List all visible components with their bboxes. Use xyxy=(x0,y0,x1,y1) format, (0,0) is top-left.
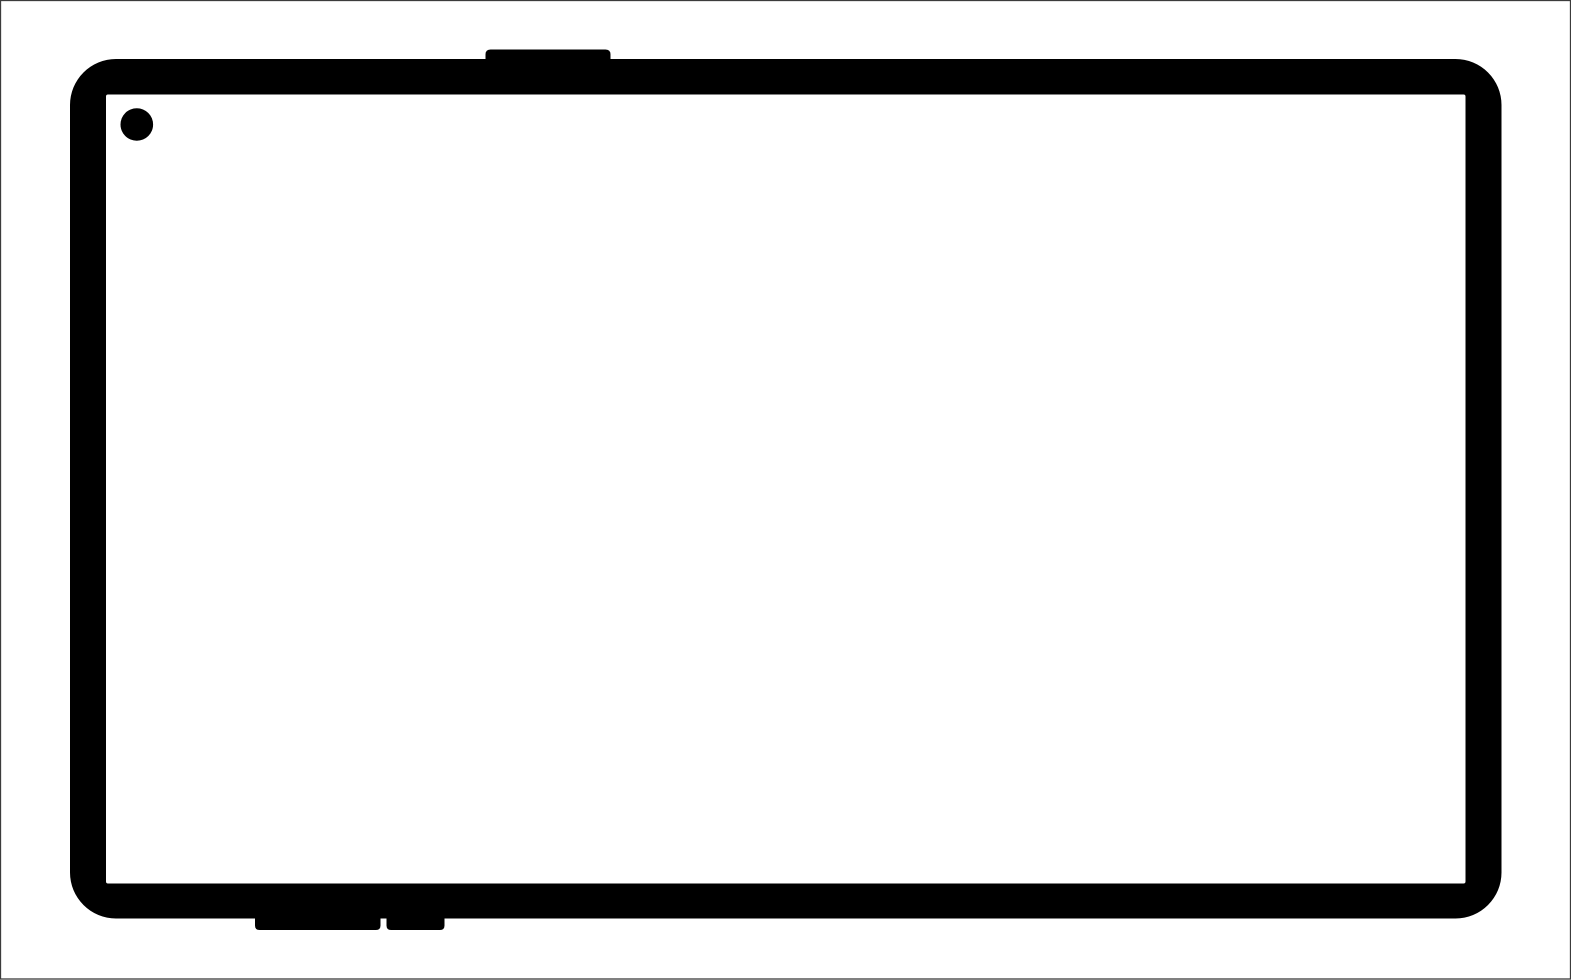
bottom volume button right xyxy=(386,915,444,930)
tablet body frame xyxy=(70,59,1502,918)
bottom volume button left xyxy=(255,915,380,930)
top power button xyxy=(486,50,610,62)
front camera xyxy=(120,108,153,141)
